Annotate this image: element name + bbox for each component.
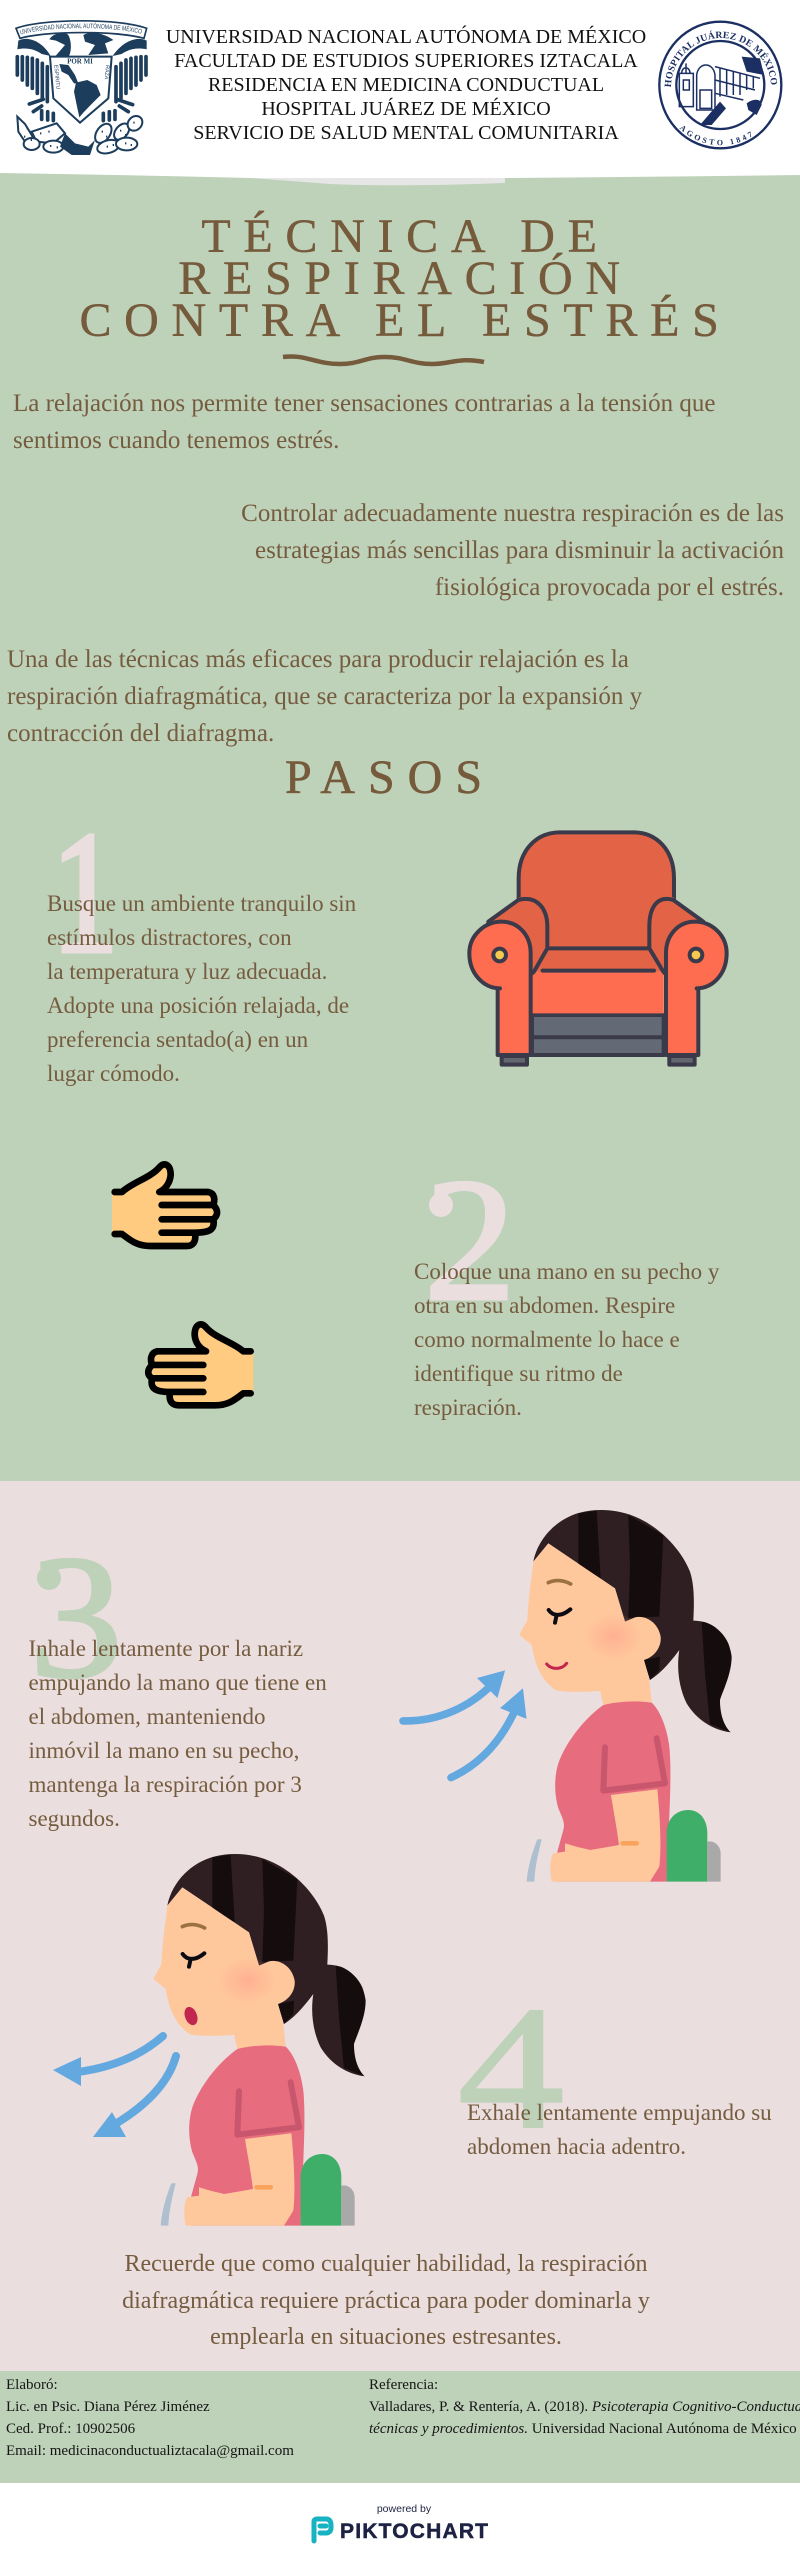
number 3: 3 — [29, 1520, 123, 1715]
footer: credits: Email: medicinaconductualiztacala@gmail.com — [6, 2443, 294, 2459]
text: controlar respiración: Controlar adecuadamente nuestra respiración es de las — [241, 500, 784, 527]
footer: reference: Valladares, P. & Rentería, A. (2018). Psicoterapia Cognitivo-Conductual: — [369, 2399, 800, 2415]
icon: Hospital Juárez crest: AGOSTO 1847 — [679, 126, 752, 146]
icon: UNAM crest — [14, 20, 148, 155]
grey wave sliver — [250, 178, 505, 185]
closing text: Recuerde que como cualquier habilidad, la respiración — [124, 2251, 648, 2277]
header white wave — [0, 0, 800, 178]
step 3 text: el abdomen, manteniendo — [28, 1704, 265, 1729]
step 3 text: mantenga la respiración por 3 — [28, 1772, 302, 1797]
step 2 text: como normalmente lo hace e — [414, 1327, 680, 1352]
icon: UNAM crest: RAZA — [104, 65, 110, 80]
header institutions text: HOSPITAL JUÁREZ DE MÉXICO — [261, 98, 551, 120]
title wave divider — [283, 356, 484, 364]
icon: hand lower — [148, 1324, 253, 1405]
footer: reference — [369, 2377, 800, 2437]
text: respiración diafragmática: respiración diafragmática, que se caracteriza por la expansión y — [7, 683, 642, 710]
header institutions text: RESIDENCIA EN MEDICINA CONDUCTUAL — [208, 74, 604, 96]
title: TÉCNICA DE — [201, 210, 610, 263]
closing text: diafragmática requiere práctica para poder dominarla y — [122, 2288, 650, 2314]
header institutions text: UNIVERSIDAD NACIONAL AUTÓNOMA DE MÉXICO — [166, 26, 646, 48]
logo: Piktochart — [314, 2503, 490, 2543]
header institutions text: SERVICIO DE SALUD MENTAL COMUNITARIA — [193, 122, 619, 144]
step 1 text: la temperatura y luz adecuada. — [47, 959, 327, 984]
title: CONTRA EL ESTRÉS — [79, 294, 732, 347]
header institutions text: FACULTAD DE ESTUDIOS SUPERIORES IZTACALA — [174, 50, 638, 72]
text: relajación: La relajación nos permite tener sensaciones contrarias a la tensión que — [13, 390, 716, 417]
logo: Piktochart: powered by — [377, 2503, 432, 2515]
footer: reference: Referencia: — [369, 2377, 438, 2393]
number 1: 1 — [52, 796, 118, 989]
step 1 text: estímulos distractores, con — [47, 925, 292, 950]
icon: Hospital Juárez crest — [658, 20, 782, 150]
footer: reference: técnicas y procedimientos. Universidad Nacional Autónoma de México — [369, 2421, 797, 2437]
icon: armchair — [469, 832, 727, 1065]
closing text — [122, 2251, 650, 2350]
icon: UNAM crest: POR MI — [67, 57, 93, 65]
step 3 text: empujando la mano que tiene en — [28, 1670, 327, 1695]
text: respiración diafragmática: contracción del diafragma. — [7, 720, 274, 747]
step 1 text: lugar cómodo. — [47, 1061, 180, 1086]
footer: credits: Lic. en Psic. Diana Pérez Jiménez — [6, 2399, 210, 2415]
panel: pink background — [0, 1481, 800, 2371]
title: RESPIRACIÓN — [178, 252, 633, 305]
text: respiración diafragmática: Una de las técnicas más eficaces para producir relajación es la — [7, 646, 629, 673]
icon: Hospital Juárez crest: HOSPITAL JUÁREZ DE MÉXICO — [664, 30, 778, 88]
header institutions text — [166, 26, 646, 144]
step 4 text: abdomen hacia adentro. — [467, 2134, 686, 2159]
step 2 text: Coloque una mano en su pecho y — [414, 1259, 719, 1284]
footer: credits: Elaboró: — [6, 2377, 58, 2393]
illustration: woman exhaling — [53, 1854, 366, 2226]
footer: credits — [6, 2377, 294, 2459]
text: relajación — [13, 390, 716, 454]
text: respiración diafragmática — [7, 646, 642, 747]
step 4 text: Exhale lentamente empujando su — [467, 2100, 772, 2125]
logo: Piktochart: PIKTOCHART — [340, 2520, 490, 2543]
panel: footer green — [0, 2371, 800, 2483]
text: controlar respiración: estrategias más sencillas para disminuir la activación — [255, 537, 784, 564]
icon: hand upper — [112, 1164, 217, 1246]
panel: green background — [0, 173, 800, 1481]
illustration: woman inhaling — [403, 1510, 732, 1882]
text: controlar respiración: fisiológica provocada por el estrés. — [435, 574, 784, 601]
step 1 text — [47, 891, 356, 1086]
icon: UNAM crest: ESPIRITU — [54, 65, 60, 89]
title — [79, 210, 732, 347]
number 2: 2 — [424, 1143, 516, 1338]
step 3 text: Inhale lentamente por la nariz — [28, 1636, 303, 1661]
step 2 text: identifique su ritmo de — [414, 1361, 623, 1386]
step 1 text: preferencia sentado(a) en un — [47, 1027, 308, 1052]
footer: credits: Ced. Prof.: 10902506 — [6, 2421, 135, 2437]
icon: UNAM crest: UNIVERSIDAD NACIONAL AUTÓNOMA DE MÉXICO — [20, 22, 142, 34]
step 1 text: Busque un ambiente tranquilo sin — [47, 891, 356, 916]
step 1 text: Adopte una posición relajada, de — [47, 993, 349, 1018]
closing text: emplearla en situaciones estresantes. — [210, 2324, 562, 2350]
step 3 text — [28, 1636, 327, 1831]
step 3 text: inmóvil la mano en su pecho, — [28, 1738, 299, 1763]
step 2 text — [414, 1259, 720, 1420]
step 3 text: segundos. — [28, 1806, 120, 1831]
step 2 text: respiración. — [414, 1395, 522, 1420]
text: controlar respiración — [241, 500, 784, 601]
heading: pasos: PASOS — [285, 751, 495, 804]
number 4: 4 — [458, 1971, 564, 2166]
text: relajación: sentimos cuando tenemos estrés. — [13, 427, 339, 454]
step 2 text: otra en su abdomen. Respire — [414, 1293, 675, 1318]
step 4 text — [467, 2100, 772, 2159]
